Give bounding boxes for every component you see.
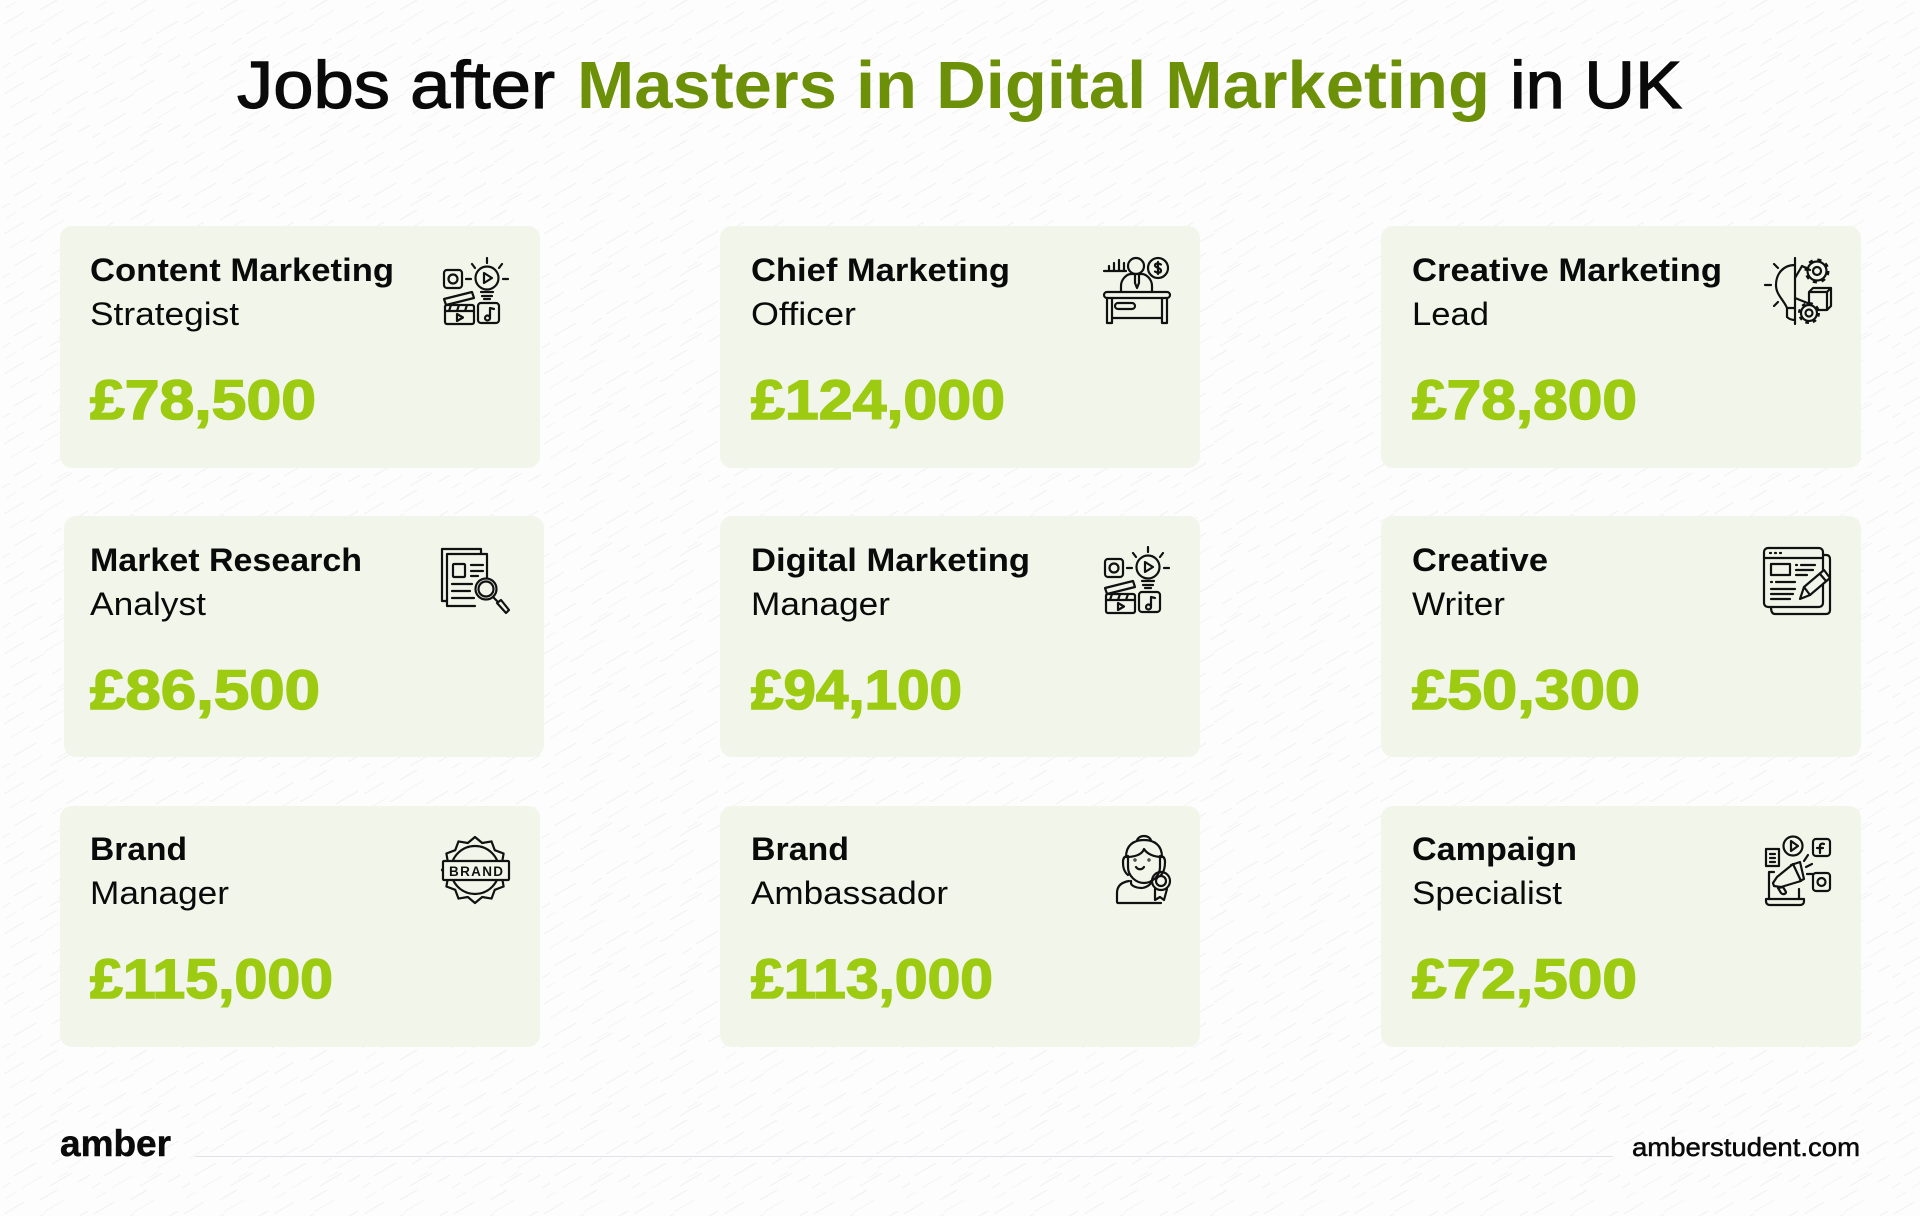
card: Campaign Specialist: [1381, 806, 1861, 1047]
icon: megaphone and social: [1766, 836, 1830, 905]
card: Brand Manager: [60, 806, 540, 1047]
salary: £113,000: [751, 947, 993, 1010]
job title: Brand: [90, 831, 187, 867]
job subtitle: Writer: [1412, 586, 1505, 622]
icon: media bulb: [1105, 547, 1169, 613]
job title: Campaign: [1412, 831, 1577, 867]
icon: document and magnifier: [442, 549, 509, 613]
job subtitle: Officer: [751, 296, 856, 332]
job title: Content Marketing: [90, 252, 394, 288]
icon: ambassador with ribbon: [1117, 836, 1170, 903]
card: Chief Marketing Officer: [720, 226, 1200, 468]
card: Brand Ambassador: [720, 806, 1200, 1047]
card: Digital Marketing Manager: [720, 516, 1200, 757]
salary: £78,500: [90, 368, 316, 431]
icon: media bulb: [444, 258, 508, 324]
icon: creative bulb and gears: [1765, 258, 1831, 324]
job title: Creative Marketing: [1412, 252, 1722, 288]
salary: £115,000: [90, 947, 333, 1010]
job subtitle: Ambassador: [751, 875, 948, 911]
job subtitle: Strategist: [90, 296, 239, 332]
icon: executive at desk: [1104, 258, 1170, 323]
job subtitle: Manager: [90, 875, 229, 911]
card: Creative Marketing Lead: [1381, 226, 1861, 468]
job subtitle: Specialist: [1412, 875, 1562, 911]
job subtitle: Analyst: [90, 586, 206, 622]
icon: web page and pencil: [1764, 548, 1830, 614]
icon: brand badge: BRAND: [449, 864, 503, 879]
footer logo: amber: amber: [60, 1123, 171, 1164]
job subtitle: Lead: [1412, 296, 1489, 332]
salary: £94,100: [751, 658, 962, 721]
job title: Creative: [1412, 542, 1548, 578]
title: [237, 48, 1682, 123]
job title: Digital Marketing: [751, 542, 1030, 578]
footer website: amberstudent.com: [1632, 1132, 1860, 1162]
card: Content Marketing Strategist: [60, 226, 540, 468]
salary: £50,300: [1412, 658, 1640, 721]
title: in UK: [1510, 48, 1682, 123]
footer divider: [195, 1156, 1613, 1157]
job title: Brand: [751, 831, 849, 867]
salary: £124,000: [751, 368, 1005, 431]
icon: brand badge: [442, 837, 509, 903]
title: Jobs after: [237, 48, 555, 123]
card: Market Research Analyst: [64, 516, 544, 757]
title: Masters in Digital Marketing: [577, 48, 1490, 123]
salary: £72,500: [1412, 947, 1637, 1010]
job title: Chief Marketing: [751, 252, 1010, 288]
salary: £86,500: [90, 658, 320, 721]
card: Creative Writer: [1381, 516, 1861, 757]
job subtitle: Manager: [751, 586, 890, 622]
salary: £78,800: [1412, 368, 1637, 431]
job title: Market Research: [90, 542, 362, 578]
